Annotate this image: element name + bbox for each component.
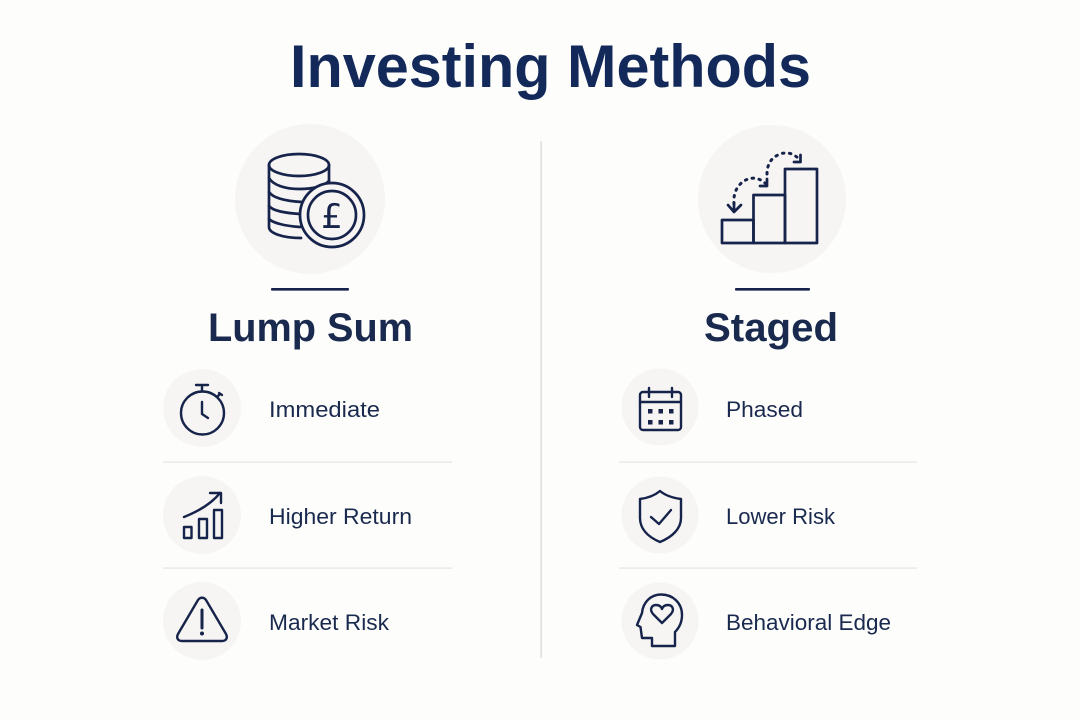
label: Market Risk: [269, 610, 390, 635]
row: market risk: [163, 582, 390, 660]
label: Higher Return: [269, 504, 412, 529]
icon: rising bar chart: [163, 476, 241, 554]
icon: head with heart: [622, 582, 698, 660]
heading: lump sum: Lump Sum: [208, 306, 413, 350]
panel: lump sum: [163, 124, 452, 660]
row: higher return: [163, 476, 412, 554]
label: Immediate: [269, 397, 380, 422]
icon: coin stack with pound: £: [321, 197, 343, 237]
icon: rising steps with dashed arrows: [698, 125, 846, 273]
heading rule: [271, 288, 349, 291]
panel: staged: [619, 125, 917, 660]
icon: coin stack with pound: [235, 124, 385, 274]
icon: warning triangle: [163, 582, 241, 660]
row: behavioral edge: [622, 582, 891, 660]
center divider: [540, 141, 542, 658]
title: Investing Methods: [290, 33, 811, 100]
label: Lower Risk: [726, 504, 836, 529]
row: immediate: [163, 369, 380, 447]
icon: stopwatch: [163, 369, 241, 447]
icon: calendar: [622, 368, 698, 446]
heading rule: [735, 288, 810, 291]
label: Behavioral Edge: [726, 610, 891, 635]
label: Phased: [726, 397, 803, 422]
row: phased: [622, 368, 803, 446]
row: lower risk: [622, 476, 836, 554]
icon: shield with check: [622, 476, 698, 554]
heading: staged: Staged: [704, 306, 838, 350]
